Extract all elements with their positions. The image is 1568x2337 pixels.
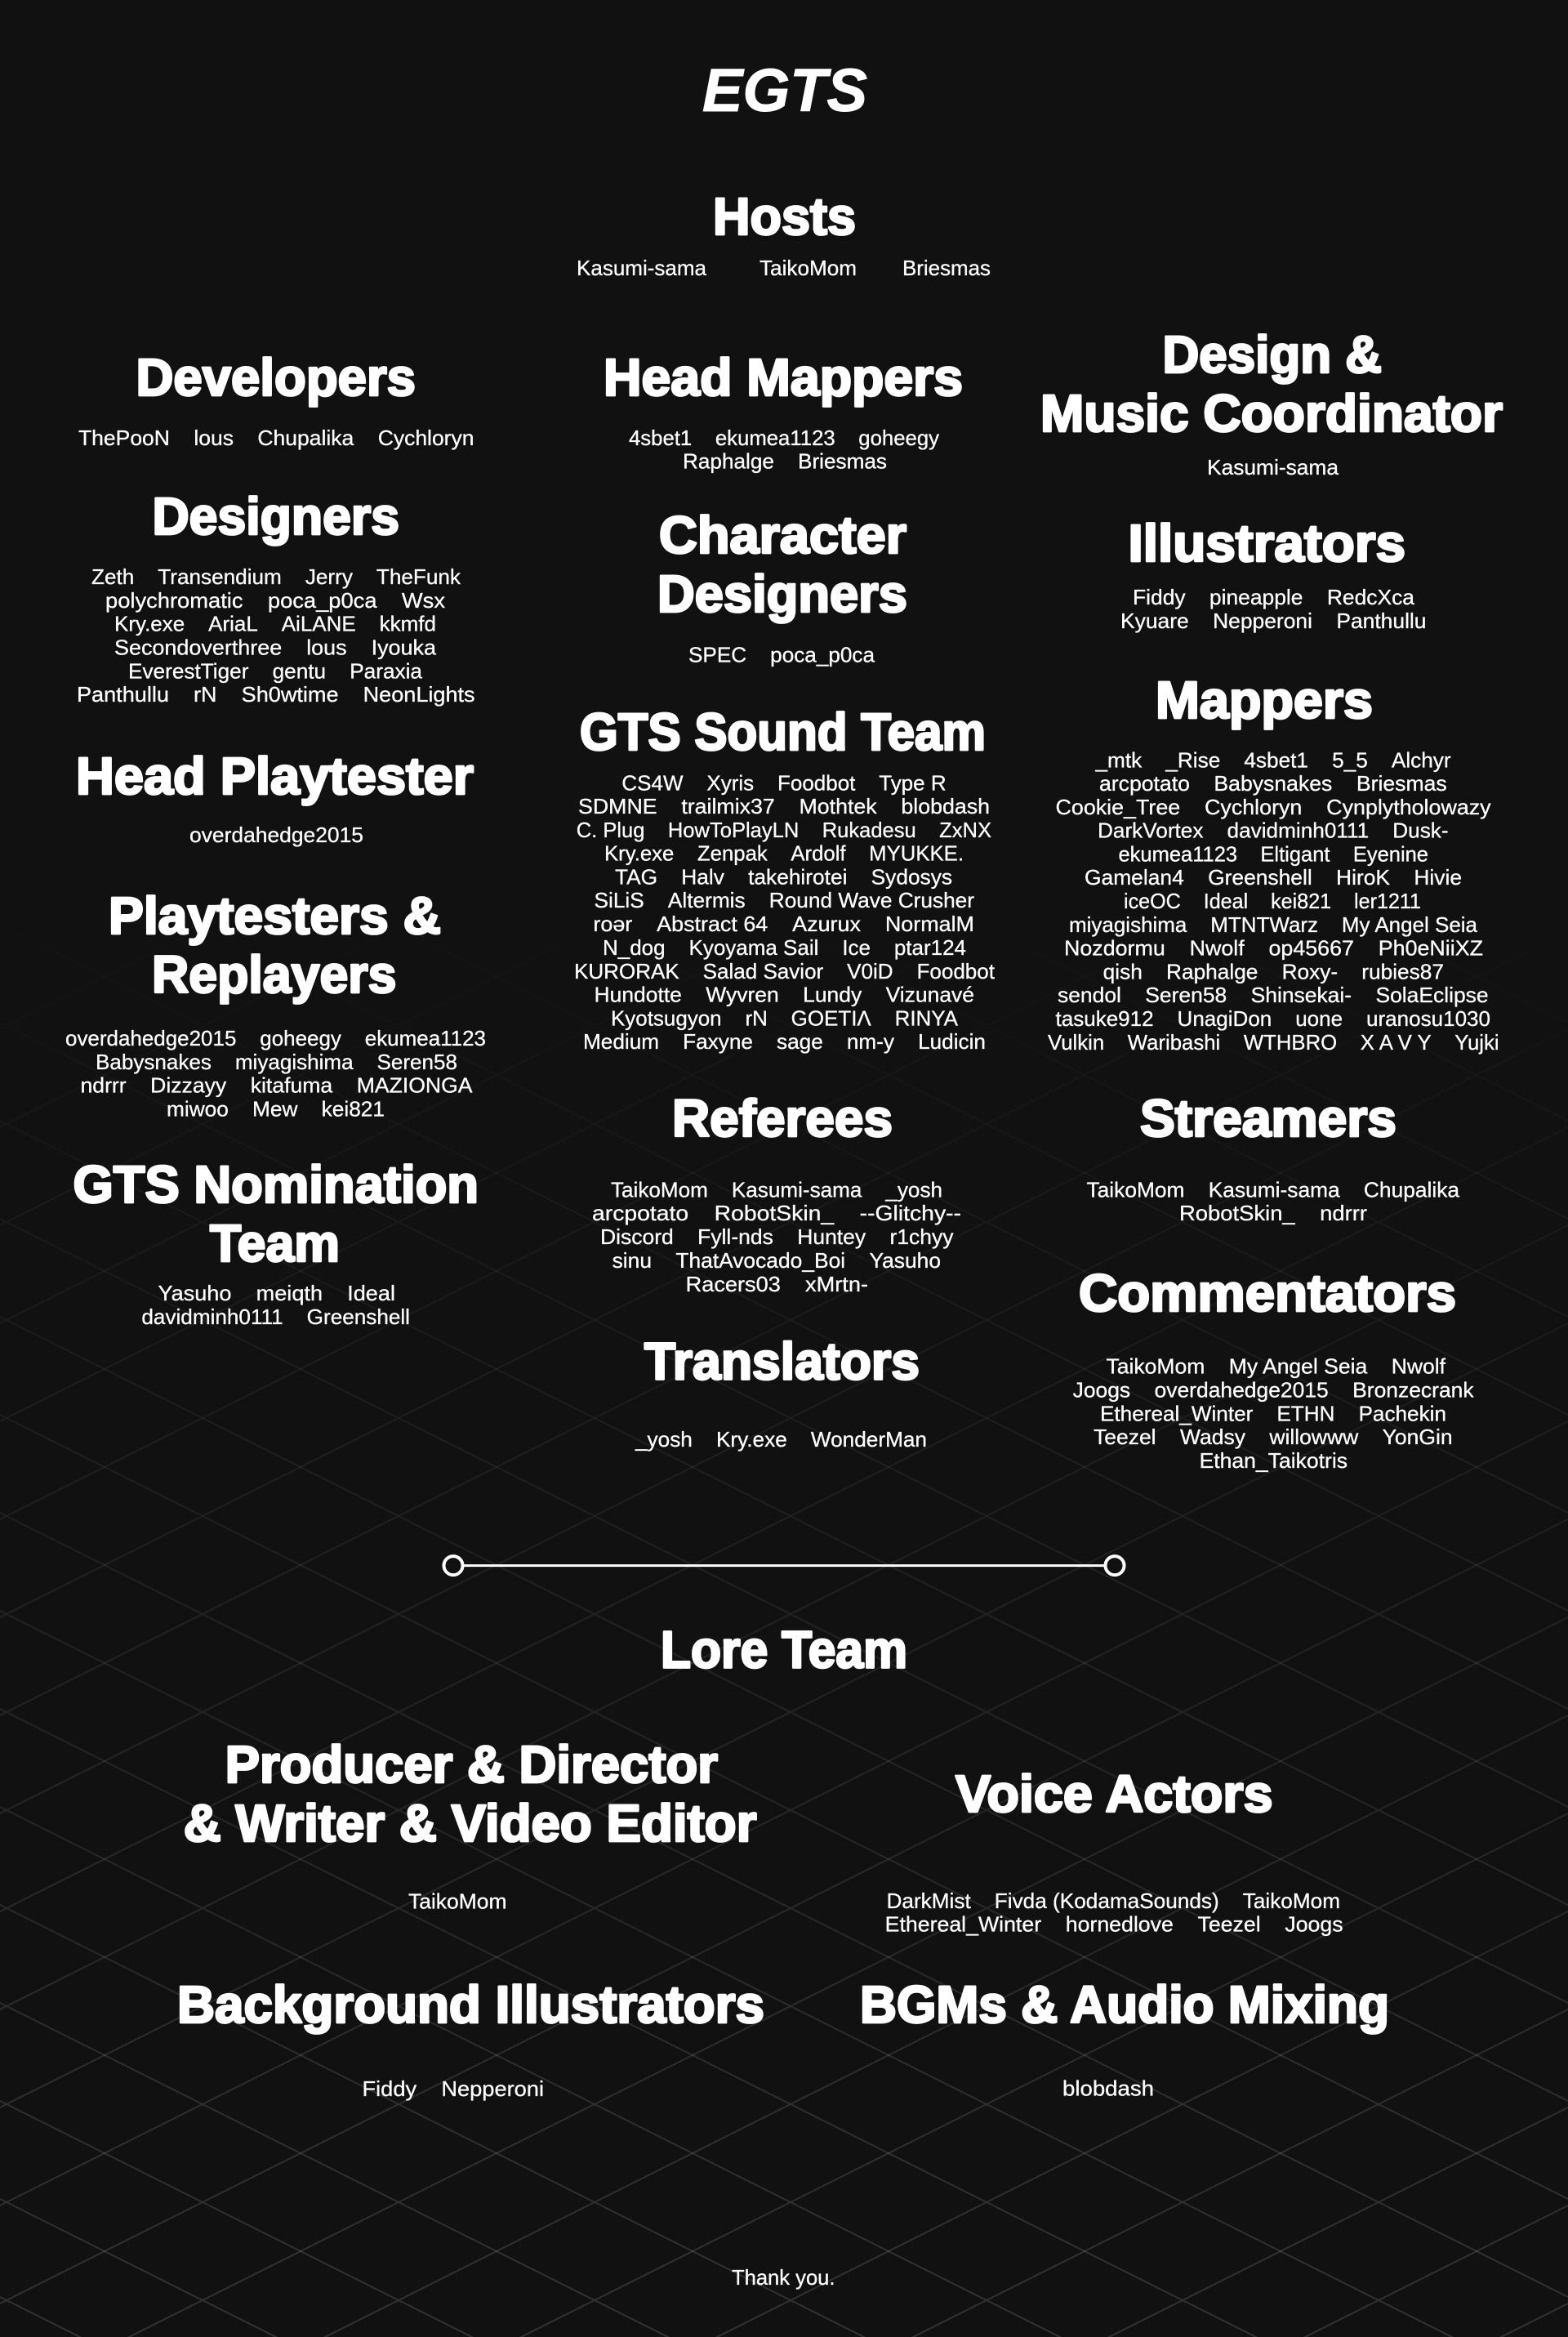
names: playtesters and replayers [65,1026,486,1121]
names: streamers: RobotSkin_ ndrrr [1179,1201,1367,1225]
section divider: line with end circles [444,1556,1124,1575]
names: designers: EverestTiger gentu Paraxia [128,658,423,683]
heading: Referees: Referees [672,1089,893,1148]
names: commentators: Joogs overdahedge2015 Bronzecrank [1073,1377,1475,1402]
names: referees: TaikoMom Kasumi-sama _yosh [611,1177,942,1202]
names: GTS sound team: Hundotte Wyvren Lundy Vizunavé [595,983,974,1007]
names: mappers: sendol Seren58 Shinsekai- SolaEclipse [1058,983,1489,1007]
names: mappers: _mtk _Rise 4sbet1 5_5 Alchyr [1094,747,1451,772]
names: designers [77,564,475,707]
names: GTS sound team: Kry.exe Zenpak Ardolf MYUKKE. [604,841,964,866]
names: referees: Racers03 xMrtn- [686,1272,868,1296]
heading: Character Designers: Character [659,506,906,564]
names: GTS sound team [574,770,996,1054]
names: referees: sinu ThatAvocado_Boi Yasuho [612,1248,941,1273]
heading: Designers: Designers [152,487,399,546]
panel: BGMs and audio mixing [860,1975,1389,2101]
names: playtesters and replayers: Babysnakes miyagishima Seren58 [96,1050,457,1074]
names: GTS nomination team: davidminh0111 Greenshell [141,1305,410,1329]
heading: Playtesters & Replayers: Replayers [152,945,397,1004]
heading: Producer & Director & Writer & Video Editor: & Writer & Video Editor [184,1794,756,1853]
names: design and music coordinator: Kasumi-sama [1207,455,1339,479]
names: commentators: Teezel Wadsy willowww YonGin [1094,1425,1453,1449]
heading: Head Mappers: Head Mappers [604,348,963,407]
names: hosts: Kasumi-sama [577,256,707,280]
names: GTS nomination team [141,1281,410,1329]
names: playtesters and replayers: miwoo Mew kei821 [167,1096,385,1121]
names: referees: Discord Fyll-nds Huntey r1chyy [600,1224,954,1249]
heading: Design & Music Coordinator: Design & [1163,325,1382,384]
names: mappers: miyagishima MTNTWarz My Angel Seia [1069,912,1478,937]
panel: referees [592,1089,961,1296]
names: designers: Kry.exe AriaL AiLANE kkmfd [114,612,436,636]
heading: Producer & Director & Writer & Video Editor: Producer & Director [225,1735,718,1794]
names: mappers: DarkVortex davidminh0111 Dusk- [1098,818,1449,843]
names: designers: Secondoverthree lous Iyouka [114,636,437,660]
heading: Lore Team: Lore Team [661,1621,907,1679]
names: background illustrators: Fiddy Nepperoni [363,2076,544,2101]
names: designers: polychromatic poca_p0ca Wsx [105,588,445,613]
names: head mappers: Raphalge Briesmas [683,449,887,474]
heading: Mappers: Mappers [1156,671,1373,729]
names: illustrators: Fiddy pineapple RedcXca [1133,585,1415,609]
names: head playtester: overdahedge2015 [189,823,363,847]
panel: streamers [1086,1089,1460,1225]
heading: Voice Actors: Voice Actors [956,1764,1273,1823]
names: designers: Panthullu rN Sh0wtime NeonLights [77,682,475,707]
heading: Playtesters & Replayers: Playtesters & [109,886,441,945]
names: GTS sound team: Medium Faxyne sage nm-y Ludicin [583,1029,986,1054]
names: mappers: tasuke912 UnagiDon uone uranosu1030 [1055,1006,1490,1031]
panel: producer and director [184,1735,756,1913]
panel: character designers [657,506,907,667]
panel: developers [78,348,474,450]
names: illustrators [1120,585,1426,633]
names: GTS sound team: SiLiS Altermis Round Wave Crusher [595,888,974,912]
heading: Head Playtester: Head Playtester [76,747,474,805]
heading: Playtesters & Replayers [109,886,441,1004]
panel: GTS sound team [574,702,996,1054]
names: designers: Zeth Transendium Jerry TheFunk [91,564,461,589]
names: hosts: TaikoMom [760,256,857,280]
heading: Producer & Director & Writer & Video Editor [184,1735,756,1853]
logo: EGTS: EGTS [702,56,867,124]
heading: Character Designers [657,506,907,623]
names: playtesters and replayers: overdahedge2015 goheegy ekumea1123 [65,1026,486,1050]
heading: Design & Music Coordinator: Music Coordinator [1040,384,1503,443]
names: hosts: Briesmas [902,256,991,280]
heading: BGMs & Audio Mixing: BGMs & Audio Mixing [860,1975,1389,2034]
names: mappers: qish Raphalge Roxy- rubies87 [1103,960,1444,984]
names: streamers [1086,1177,1460,1225]
heading: Streamers: Streamers [1140,1089,1396,1148]
names: mappers: iceOC Ideal kei821 ler1211 [1124,889,1421,913]
names: mappers: Vulkin Waribashi WTHBRO X A V Y Yujki [1048,1030,1499,1055]
closing text: Thank you.: Thank you. [732,2265,835,2290]
names: GTS sound team: Kyotsugyon rN GOETIΛ RINYA [611,1006,959,1030]
names: mappers [1048,747,1499,1055]
names: head mappers: 4sbet1 ekumea1123 goheegy [629,426,939,450]
panel: playtesters and replayers [65,886,486,1121]
heading: GTS Sound Team: GTS Sound Team [580,702,986,761]
names: illustrators: Kyuare Nepperoni Panthullu [1120,609,1426,633]
names: mappers: arcpotato Babysnakes Briesmas [1099,771,1447,796]
names: producer and director: TaikoMom [408,1889,506,1913]
names: hosts [577,256,991,280]
names: commentators: Ethereal_Winter ETHN Pachekin [1100,1401,1446,1425]
names: GTS sound team: CS4W Xyris Foodbot Type R [621,770,947,795]
names: commentators [1073,1354,1475,1473]
names: referees: arcpotato RobotSkin_ --Glitchy-- [592,1201,961,1225]
names: mappers: Gamelan4 Greenshell HiroK Hivie [1085,865,1462,890]
names: voice actors: DarkMist Fivda (KodamaSounds) TaikoMom [887,1889,1340,1913]
names: GTS nomination team: Yasuho meiqth Ideal [158,1281,395,1305]
heading: GTS Nomination Team: GTS Nomination [74,1155,479,1214]
names: GTS sound team: N_dog Kyoyama Sail Ice ptar124 [603,935,966,960]
heading: Translators: Translators [644,1331,920,1390]
names: BGMs and audio mixing: blobdash [1062,2076,1154,2101]
panel: head mappers [604,348,963,474]
panel: illustrators [1120,514,1426,633]
panel: GTS nomination team [74,1155,479,1329]
names: head mappers [629,426,939,474]
heading: Hosts: Hosts [713,187,856,246]
names: mappers: Nozdormu Nwolf op45667 Ph0eNiiXZ [1064,936,1483,961]
names: character designers: SPEC poca_p0ca [688,642,875,667]
panel: translators [635,1331,927,1452]
names: mappers: Cookie_Tree Cychloryn Cynplytholowazy [1055,795,1491,819]
names: GTS sound team: SDMNE trailmix37 Mothtek blobdash [578,794,990,818]
heading: Developers: Developers [136,348,416,407]
names: referees [592,1177,961,1296]
heading: GTS Nomination Team: Team [210,1214,340,1273]
panel: commentators [1073,1264,1475,1473]
names: commentators: TaikoMom My Angel Seia Nwolf [1106,1354,1446,1379]
names: GTS sound team: C. Plug HowToPlayLN Rukadesu ZxNX [577,818,991,842]
panel: voice actors [885,1764,1343,1936]
names: translators: _yosh Kry.exe WonderMan [635,1427,927,1452]
names: voice actors: Ethereal_Winter hornedlove Teezel Joogs [885,1911,1343,1936]
names: GTS sound team: KURORAK Salad Savior V0iD Foodbot [574,959,996,983]
names: voice actors [885,1889,1343,1936]
panel: hosts [577,187,991,280]
names: mappers: ekumea1123 Eltigant Eyenine [1119,841,1428,866]
names: streamers: TaikoMom Kasumi-sama Chupalika [1086,1177,1460,1202]
heading: Background Illustrators: Background Illustrators [177,1975,764,2034]
names: GTS sound team: TAG Halv takehirotei Sydosys [615,864,952,889]
names: developers: ThePooN lous Chupalika Cychloryn [78,426,474,450]
panel: designers [77,487,475,707]
panel: mappers [1048,671,1499,1055]
names: playtesters and replayers: ndrrr Dizzayy kitafuma MAZIONGA [80,1073,473,1098]
heading: GTS Nomination Team [74,1155,479,1273]
panel: background illustrators [177,1975,764,2101]
heading: Commentators: Commentators [1079,1264,1456,1322]
names: commentators: Ethan_Taikotris [1200,1448,1348,1473]
panel: design and music coordinator [1040,325,1503,479]
names: GTS sound team: roər Abstract 64 Azurux NormalM [593,912,974,936]
heading: Design & Music Coordinator [1040,325,1503,443]
heading: Illustrators: Illustrators [1129,514,1405,573]
heading: Character Designers: Designers [657,564,907,623]
panel: head playtester [76,747,474,847]
